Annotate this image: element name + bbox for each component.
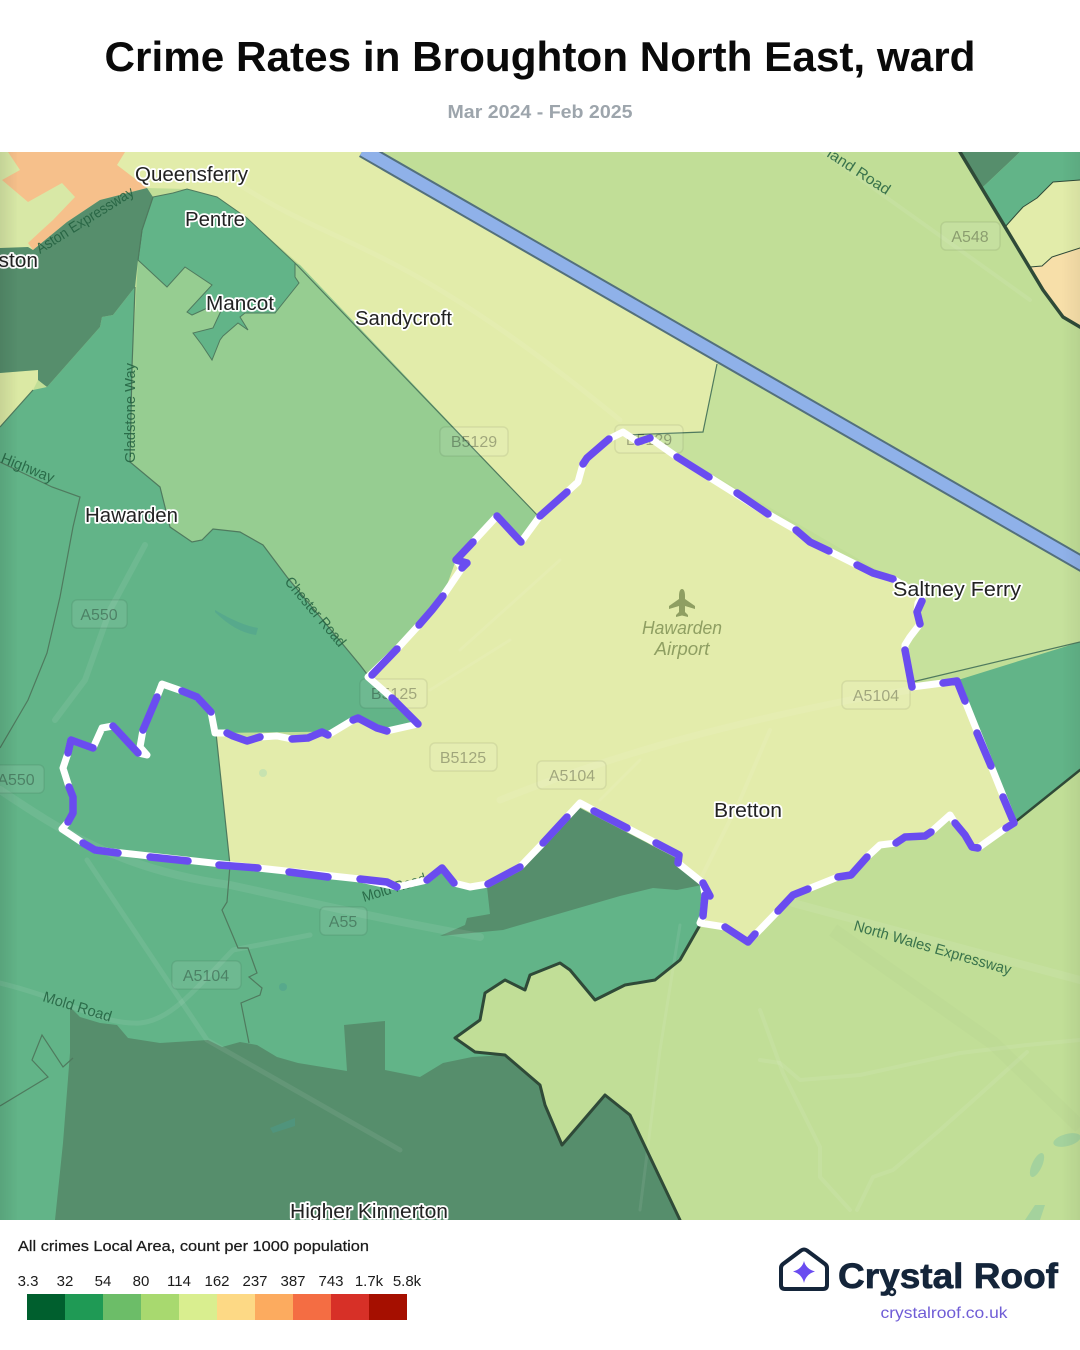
place labels <box>0 164 1021 1223</box>
street labels: Mold Road <box>360 870 428 906</box>
place labels: Queensferry <box>135 164 248 186</box>
legend values: 743 <box>318 1273 344 1290</box>
area: dark estate south of ward <box>440 808 702 936</box>
street labels: Gladstone Way <box>122 363 139 463</box>
logo key detail <box>889 1289 895 1295</box>
area: Mancot mid green <box>130 260 540 678</box>
legend values: 5.8k <box>393 1273 422 1290</box>
road label boxes: A5104 <box>853 688 899 705</box>
legend values: 162 <box>204 1273 230 1290</box>
area: teal top right <box>983 152 1080 227</box>
label: Hawarden Airport <box>642 618 722 659</box>
road label boxes: B5129 <box>626 432 672 449</box>
legend <box>18 1238 422 1320</box>
icon: airport plane <box>669 589 695 617</box>
area: dark green south <box>55 1007 680 1220</box>
legend values: 3.3 <box>18 1273 38 1290</box>
place labels: Sandycroft <box>355 308 452 330</box>
area: pale lobe south <box>542 1087 579 1142</box>
legend values: 114 <box>167 1273 191 1290</box>
road label boxes: B5129 <box>451 434 497 451</box>
area: Sandycroft pale yellow <box>117 152 735 518</box>
street labels: Mold Road <box>41 989 114 1026</box>
street labels: North Wales Expressway <box>852 918 1014 979</box>
map edge shading <box>0 152 1080 1220</box>
area: pale top right <box>1005 180 1080 267</box>
district border lines <box>0 197 1080 1106</box>
area: main green west and south <box>0 287 702 1220</box>
road label boxes: A548 <box>951 229 989 246</box>
legend values: 237 <box>242 1273 268 1290</box>
area: ward yellow <box>216 432 1014 942</box>
map <box>0 145 1080 1223</box>
legend values: 1.7k <box>355 1273 384 1290</box>
area: dark green north-west <box>0 188 153 387</box>
logo: Crystal Roof <box>781 1250 1058 1322</box>
place labels: Mancot <box>206 293 274 315</box>
title: Crime Rates in Broughton North East, ward <box>104 33 976 80</box>
area: pale west <box>0 370 38 427</box>
street labels: Chester Road <box>281 574 349 650</box>
legend values: 54 <box>95 1273 111 1290</box>
icon: house with star <box>781 1250 827 1289</box>
road label boxes: A5104 <box>549 768 595 785</box>
legend colour scale <box>27 1294 407 1320</box>
place labels: Saltney Ferry <box>893 579 1021 601</box>
road label boxes: A5104 <box>183 968 229 985</box>
legend title: All crimes Local Area, count per 1000 population <box>18 1238 369 1255</box>
road label boxes: B5125 <box>371 686 417 703</box>
dark thick borders <box>455 152 1080 1220</box>
logo wordmark: Crystal Roof <box>838 1257 1058 1296</box>
street labels <box>0 145 1014 1026</box>
legend values <box>18 1273 422 1290</box>
street labels: land Road <box>824 145 893 199</box>
area: east of ward <box>630 362 1080 682</box>
legend values: 80 <box>133 1273 149 1290</box>
area: sand top right <box>1030 248 1080 327</box>
place labels: Hawarden <box>85 505 178 527</box>
water patches <box>215 610 1080 1220</box>
roads <box>0 542 784 1212</box>
ward boundary: white and purple dashed outline <box>62 432 1014 942</box>
legend values: 32 <box>57 1273 73 1290</box>
label: Hawarden Airport: Airport <box>653 639 711 659</box>
road label boxes: B5125 <box>440 750 486 767</box>
place labels: Pentre <box>185 209 245 231</box>
road label boxes <box>0 222 1000 989</box>
map area: base light green <box>0 152 1080 900</box>
river: blue waterway <box>363 150 1080 565</box>
subtitle: date range: Mar 2024 - Feb 2025 <box>448 102 632 122</box>
place labels: Higher Kinnerton <box>290 1201 448 1223</box>
street labels: Aston Expressway <box>33 183 137 257</box>
label: Hawarden Airport: Hawarden <box>642 618 722 638</box>
area: pale top-left <box>0 152 75 250</box>
road label boxes: A550 <box>80 607 118 624</box>
legend values: 387 <box>280 1273 306 1290</box>
website link: crystalroof.co.uk <box>880 1305 1009 1322</box>
area: dark top right <box>960 152 1020 187</box>
area: pentre green <box>138 189 299 360</box>
place labels: Bretton <box>714 800 782 822</box>
area: green south-east of Saltney Ferry <box>958 642 1080 823</box>
road label boxes: A55 <box>329 914 357 931</box>
area: orange north-west <box>2 152 147 250</box>
street labels: Highway <box>0 450 57 487</box>
